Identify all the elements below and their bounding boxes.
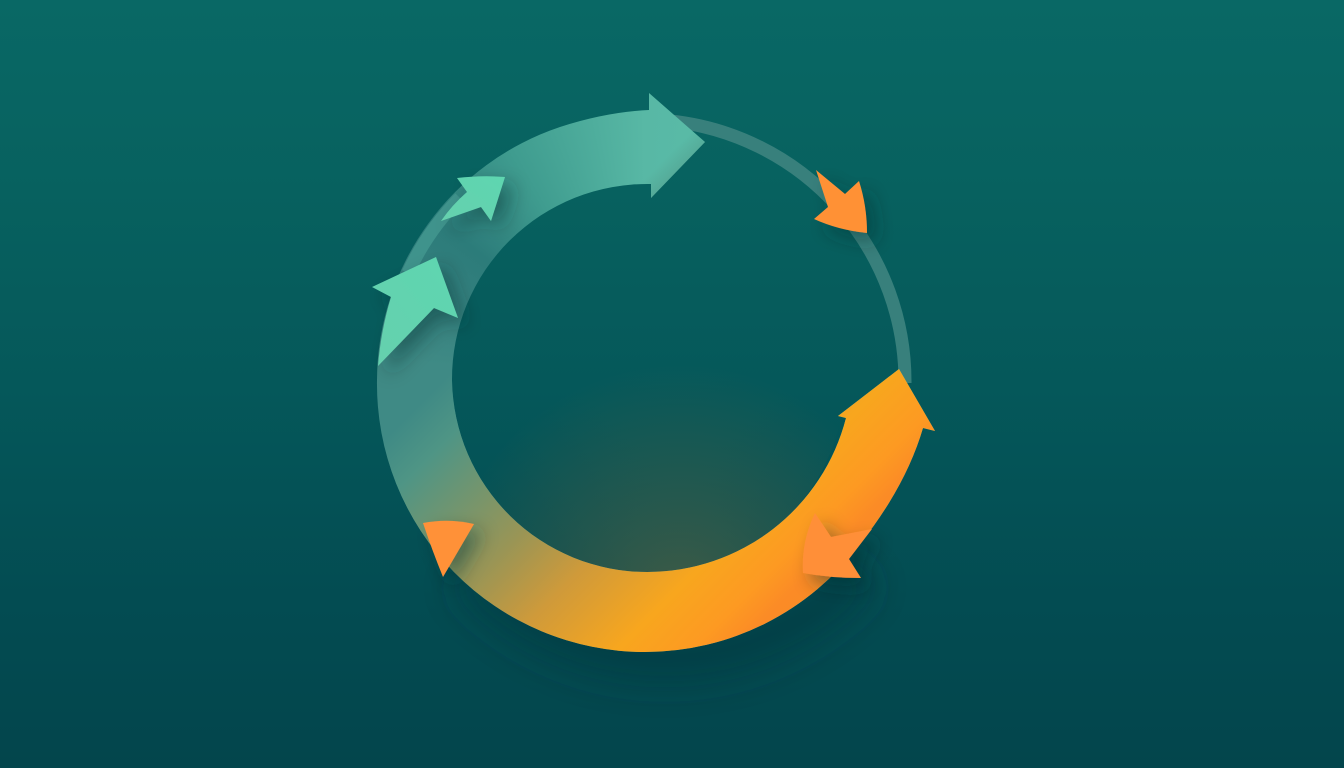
thin ring track [670, 121, 905, 383]
thin ring highlight on left [408, 198, 460, 273]
main curved arrow band [377, 93, 935, 652]
icon: orange arrow top right [814, 170, 867, 233]
icon: orange arrow bottom right [803, 513, 872, 578]
icon: large teal arrow [372, 257, 458, 366]
inner warm glow [449, 180, 845, 576]
icon: orange arrow bottom left [423, 521, 474, 577]
band shadow [470, 570, 860, 657]
icon: small teal arrow [441, 176, 505, 221]
